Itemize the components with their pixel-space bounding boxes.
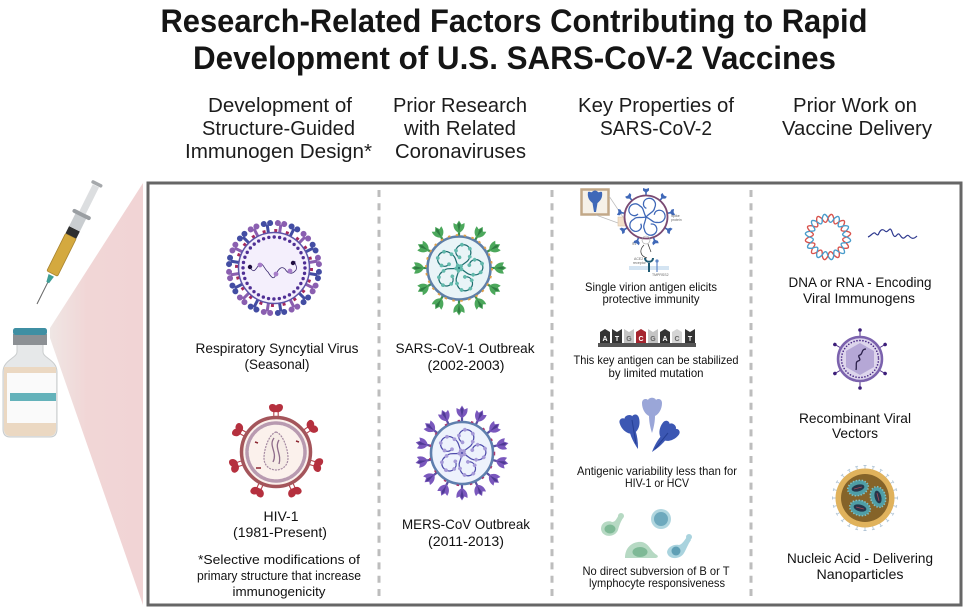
icon: HIV-1 virus <box>228 404 324 499</box>
icon: spike protein and ACE2 binding diagram: protein <box>671 218 682 222</box>
label: antigenic variability <box>577 464 737 490</box>
icon: three antigen variants <box>618 398 682 458</box>
heading: prior research with related coronaviruses: with Related <box>403 118 516 140</box>
label: nucleic acid nanoparticles <box>787 550 933 582</box>
icon: spike protein and ACE2 binding diagram: receptor <box>633 261 647 265</box>
icon: SARS-CoV-1 virus <box>412 220 506 316</box>
panel: main frame <box>148 183 961 605</box>
label: nucleic acid nanoparticles: Nanoparticles <box>816 566 904 582</box>
icon: lymphocyte cells <box>601 509 692 558</box>
icon: gene sequence with mutated base: G <box>626 336 632 343</box>
icon: recombinant viral vector <box>832 328 888 390</box>
title: Research-Related Factors Contributing to Rapid <box>160 3 868 39</box>
heading: prior work on vaccine delivery <box>782 95 932 140</box>
icon: syringe <box>28 178 107 308</box>
icon: respiratory syncytial virus <box>226 220 322 316</box>
icon: gene sequence with mutated base: A <box>662 336 668 343</box>
icon: gene sequence with mutated base: C <box>674 336 680 343</box>
label: antigenic variability: HIV-1 or HCV <box>625 476 689 490</box>
label: nucleic acid nanoparticles: Nucleic Acid - Delivering <box>787 550 933 566</box>
icon: RNA strand <box>868 229 917 238</box>
label: single virion antigen: Single virion antigen elicits <box>585 280 717 294</box>
label: SARS-CoV-1 outbreak <box>396 340 535 373</box>
label: respiratory syncytial virus: (Seasonal) <box>244 356 310 372</box>
label: MERS-CoV outbreak <box>402 516 531 549</box>
label: stabilized by limited mutation: This key antigen can be stabilized <box>574 353 738 367</box>
heading: structure-guided immunogen design: Development of <box>208 95 352 117</box>
label: DNA or RNA: DNA or RNA - Encoding <box>788 274 932 290</box>
heading: key properties of SARS-CoV-2: Key Properties of <box>578 95 734 117</box>
icon: gene sequence with mutated base <box>598 329 696 347</box>
icon: gene sequence with mutated base: T <box>688 336 693 343</box>
icon: gene sequence with mutated base: C <box>638 336 644 343</box>
heading: prior work on vaccine delivery: Vaccine Delivery <box>782 118 932 140</box>
icon: circular DNA plasmid <box>803 212 853 262</box>
label: respiratory syncytial virus <box>196 340 358 372</box>
footnote: selective modifications: immunogenicity <box>232 584 326 599</box>
label: DNA or RNA <box>788 274 932 306</box>
icon: vaccine vial <box>3 328 57 437</box>
label: stabilized by limited mutation <box>574 353 738 380</box>
label: SARS-CoV-1 outbreak: SARS-CoV-1 Outbreak <box>396 340 535 356</box>
icon: spike protein and ACE2 binding diagram: Spike <box>671 214 680 218</box>
heading: structure-guided immunogen design: Immunogen Design* <box>185 141 372 163</box>
label: DNA or RNA: Viral Immunogens <box>803 290 915 306</box>
icon: spike protein and ACE2 binding diagram: S1 <box>632 242 636 246</box>
label: single virion antigen: protective immunity <box>602 292 700 306</box>
label: MERS-CoV outbreak: (2011-2013) <box>428 533 504 549</box>
heading: structure-guided immunogen design: Structure-Guided <box>202 118 355 140</box>
icon: lipid nanoparticle <box>832 466 898 530</box>
label: recombinant viral vectors <box>799 410 911 441</box>
footnote: selective modifications: primary structure that increase <box>197 568 361 583</box>
icon: spike protein and ACE2 binding diagram <box>582 188 682 277</box>
heading: key properties of SARS-CoV-2 <box>578 95 734 140</box>
footnote: selective modifications: *Selective modifications of <box>198 552 360 567</box>
label: MERS-CoV outbreak: MERS-CoV Outbreak <box>402 516 531 532</box>
heading: structure-guided immunogen design <box>185 95 372 163</box>
icon: spike protein and ACE2 binding diagram: TMPRSS2 <box>652 273 669 277</box>
label: HIV-1 <box>233 508 327 540</box>
label: no direct subversion: lymphocyte responsiveness <box>589 576 725 590</box>
heading: prior research with related coronaviruses: Prior Research <box>393 95 527 117</box>
label: antigenic variability: Antigenic variability less than for <box>577 464 737 478</box>
label: HIV-1: (1981-Present) <box>233 524 327 540</box>
label: no direct subversion <box>582 564 730 590</box>
icon: spike protein and ACE2 binding diagram: ACE2 <box>634 257 643 261</box>
title: Development of U.S. SARS-CoV-2 Vaccines <box>193 40 836 76</box>
label: SARS-CoV-1 outbreak: (2002-2003) <box>428 357 504 373</box>
heading: prior research with related coronaviruses <box>393 95 527 163</box>
icon: gene sequence with mutated base: A <box>602 336 608 343</box>
icon: gene sequence with mutated base: T <box>615 336 620 343</box>
label: respiratory syncytial virus: Respiratory Syncytial Virus <box>196 340 358 356</box>
icon: gene sequence with mutated base: G <box>650 336 656 343</box>
label: single virion antigen <box>585 280 717 306</box>
label: stabilized by limited mutation: by limited mutation <box>608 366 704 380</box>
label: no direct subversion: No direct subversion of B or T <box>582 564 730 578</box>
heading: prior work on vaccine delivery: Prior Work on <box>793 95 917 117</box>
footnote: selective modifications <box>197 552 361 599</box>
heading: key properties of SARS-CoV-2: SARS-CoV-2 <box>600 118 712 140</box>
heading: prior research with related coronaviruses: Coronaviruses <box>395 141 526 163</box>
label: HIV-1: HIV-1 <box>264 508 299 524</box>
icon: MERS-CoV virus <box>414 406 510 500</box>
zoom wedge from vial to panel <box>50 183 143 605</box>
title <box>160 3 868 76</box>
label: recombinant viral vectors: Recombinant Viral <box>799 410 911 426</box>
label: recombinant viral vectors: Vectors <box>832 425 878 441</box>
